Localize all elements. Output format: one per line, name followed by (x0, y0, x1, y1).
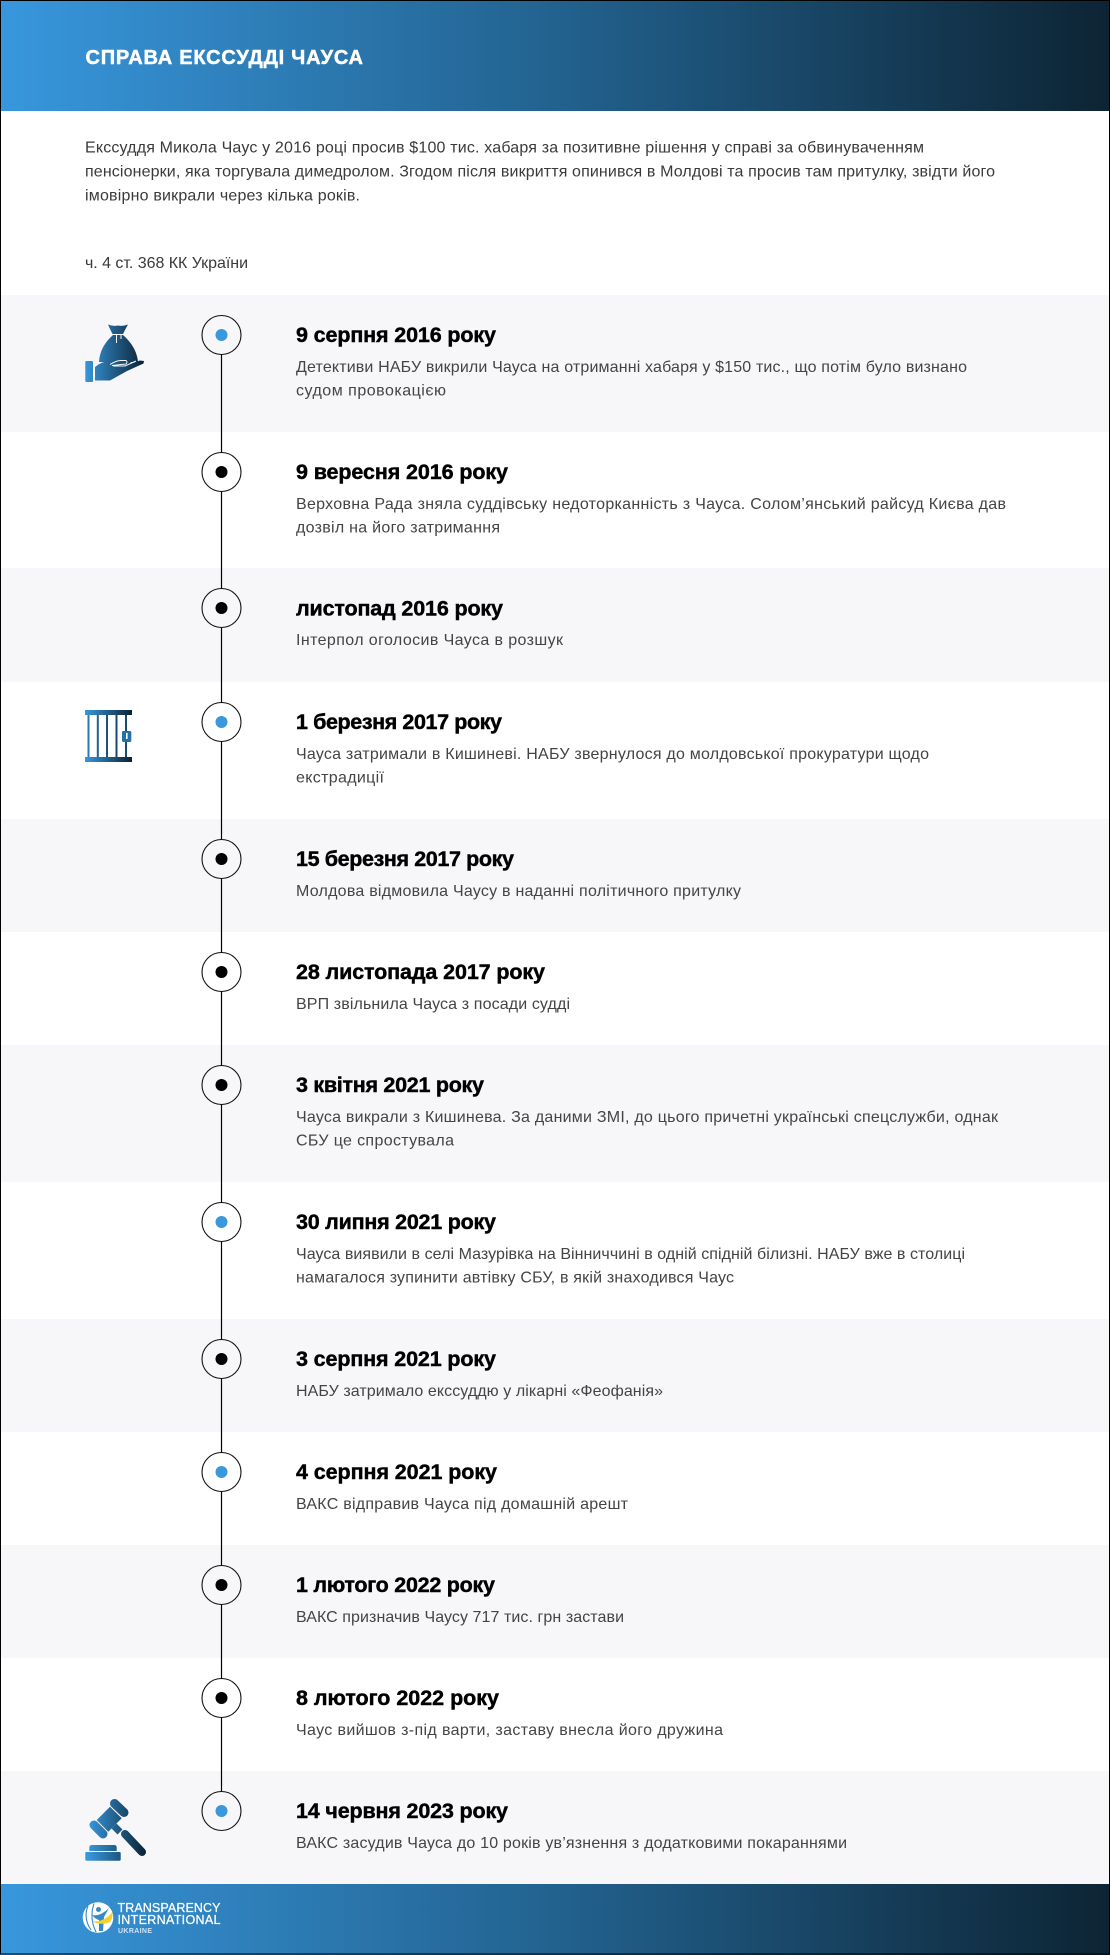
event: 3 квітня 2021: Чауса викрали з Кишинева. За даними ЗМІ, до цього причетні українські спецслужби, однак (296, 1109, 999, 1126)
event: 3 квітня 2021 (0, 1045, 1110, 1182)
event: 14 червня 2023 (0, 1771, 1110, 1884)
event: 15 березня 2017: 15 березня 2017 року (296, 847, 514, 871)
event: 30 липня 2021: 30 липня 2021 року (296, 1210, 496, 1234)
Transparency International Ukraine logo (83, 1901, 221, 1935)
event: 3 квітня 2021: СБУ це спростувала (296, 1132, 454, 1150)
event: 9 серпня 2016: Детективи НАБУ викрили Чауса на отриманні хабаря у $150 тис., що потім було визнано (296, 359, 967, 376)
legal article reference: ч. 4 ст. 368 КК України (85, 255, 248, 272)
event: 28 листопада 2017: ВРП звільнила Чауса з посади судді (296, 996, 570, 1013)
event: 8 лютого 2022: Чаус вийшов з-під варти, заставу внесла його дружина (296, 1722, 723, 1739)
event: 3 серпня 2021: НАБУ затримало екссуддю у лікарні «Феофанія» (296, 1383, 663, 1400)
event: 30 липня 2021: намагалося зупинити автівку СБУ, в якій знаходився Чаус (296, 1270, 734, 1286)
intro text block (85, 140, 995, 204)
intro text block: Екссуддя Микола Чаус у 2016 році просив $100 тис. хабаря за позитивне рішення у справі за обвинуваченням (85, 140, 924, 156)
event: 30 липня 2021 (0, 1182, 1110, 1319)
intro text block: імовірно викрали через кілька років. (85, 188, 360, 204)
event: 3 серпня 2021 (0, 1319, 1110, 1432)
event: 9 серпня 2016 (0, 295, 1110, 432)
event: 1 березня 2017 (0, 682, 1110, 819)
event: листопад 2016: листопад 2016 року (296, 596, 503, 620)
event: 14 червня 2023: 14 червня 2023 року (296, 1799, 508, 1823)
footer banner (0, 1884, 1110, 1955)
event: 1 лютого 2022 (0, 1545, 1110, 1658)
event: 9 вересня 2016: Верховна Рада зняла суддівську недоторканність з Чауса. Солом’янський райсуд Києва дав (296, 496, 1006, 513)
event: 15 березня 2017 (0, 819, 1110, 932)
event: 30 липня 2021: Чауса виявили в селі Мазурівка на Вінниччині в одній спідній білизні. НАБУ вже в столиці (296, 1246, 965, 1263)
intro text block: пенсіонерки, яка торгувала димедролом. Згодом після викриття опинився в Молдові та просив там притулку, звідти його (85, 164, 995, 180)
event: 3 серпня 2021: 3 серпня 2021 року (296, 1347, 496, 1371)
timeline connector line (220, 354, 222, 1792)
Transparency International Ukraine logo: TRANSPARENCY (118, 1901, 221, 1915)
icon: gavel (85, 1804, 142, 1861)
icon: prison bars (85, 710, 132, 762)
event: 1 березня 2017: Чауса затримали в Кишиневі. НАБУ звернулося до молдовської прокуратури щодо (296, 746, 929, 763)
header banner (0, 0, 1110, 111)
event: 1 лютого 2022: ВАКС призначив Чаусу 717 тис. грн застави (296, 1609, 624, 1626)
title: СПРАВА ЕКССУДДІ ЧАУСА (86, 47, 363, 69)
Transparency International Ukraine logo: UKRAINE (118, 1928, 152, 1935)
event: 8 лютого 2022: 8 лютого 2022 року (296, 1686, 499, 1710)
event: 3 квітня 2021: 3 квітня 2021 року (296, 1073, 484, 1097)
event: листопад 2016: Інтерпол оголосив Чауса в розшук (296, 632, 564, 649)
event: 4 серпня 2021: ВАКС відправив Чауса під домашній арешт (296, 1496, 629, 1513)
event: 4 серпня 2021: 4 серпня 2021 року (296, 1460, 497, 1484)
event: 28 листопада 2017: 28 листопада 2017 року (296, 960, 545, 984)
event: 1 лютого 2022: 1 лютого 2022 року (296, 1573, 495, 1597)
event: 14 червня 2023: ВАКС засудив Чауса до 10 років ув’язнення з додатковими покараннями (296, 1835, 847, 1852)
event: 9 вересня 2016 (0, 432, 1110, 568)
event: 4 серпня 2021 (0, 1432, 1110, 1545)
event: 28 листопада 2017 (0, 932, 1110, 1045)
event: 9 вересня 2016: дозвіл на його затримання (296, 520, 500, 536)
Transparency International Ukraine logo: INTERNATIONAL (118, 1913, 221, 1927)
event: 8 лютого 2022 (0, 1658, 1110, 1771)
event: 1 березня 2017: 1 березня 2017 року (296, 710, 502, 734)
event: листопад 2016 (0, 568, 1110, 682)
event: 9 серпня 2016: судом провокацією (296, 382, 446, 400)
event: 1 березня 2017: екстрадиції (296, 770, 385, 786)
icon: money bag on hand (85, 324, 144, 382)
event: 9 вересня 2016: 9 вересня 2016 року (296, 460, 508, 484)
event: 9 серпня 2016: 9 серпня 2016 року (296, 323, 496, 347)
event: 15 березня 2017: Молдова відмовила Чаусу в наданні політичного притулку (296, 883, 741, 900)
